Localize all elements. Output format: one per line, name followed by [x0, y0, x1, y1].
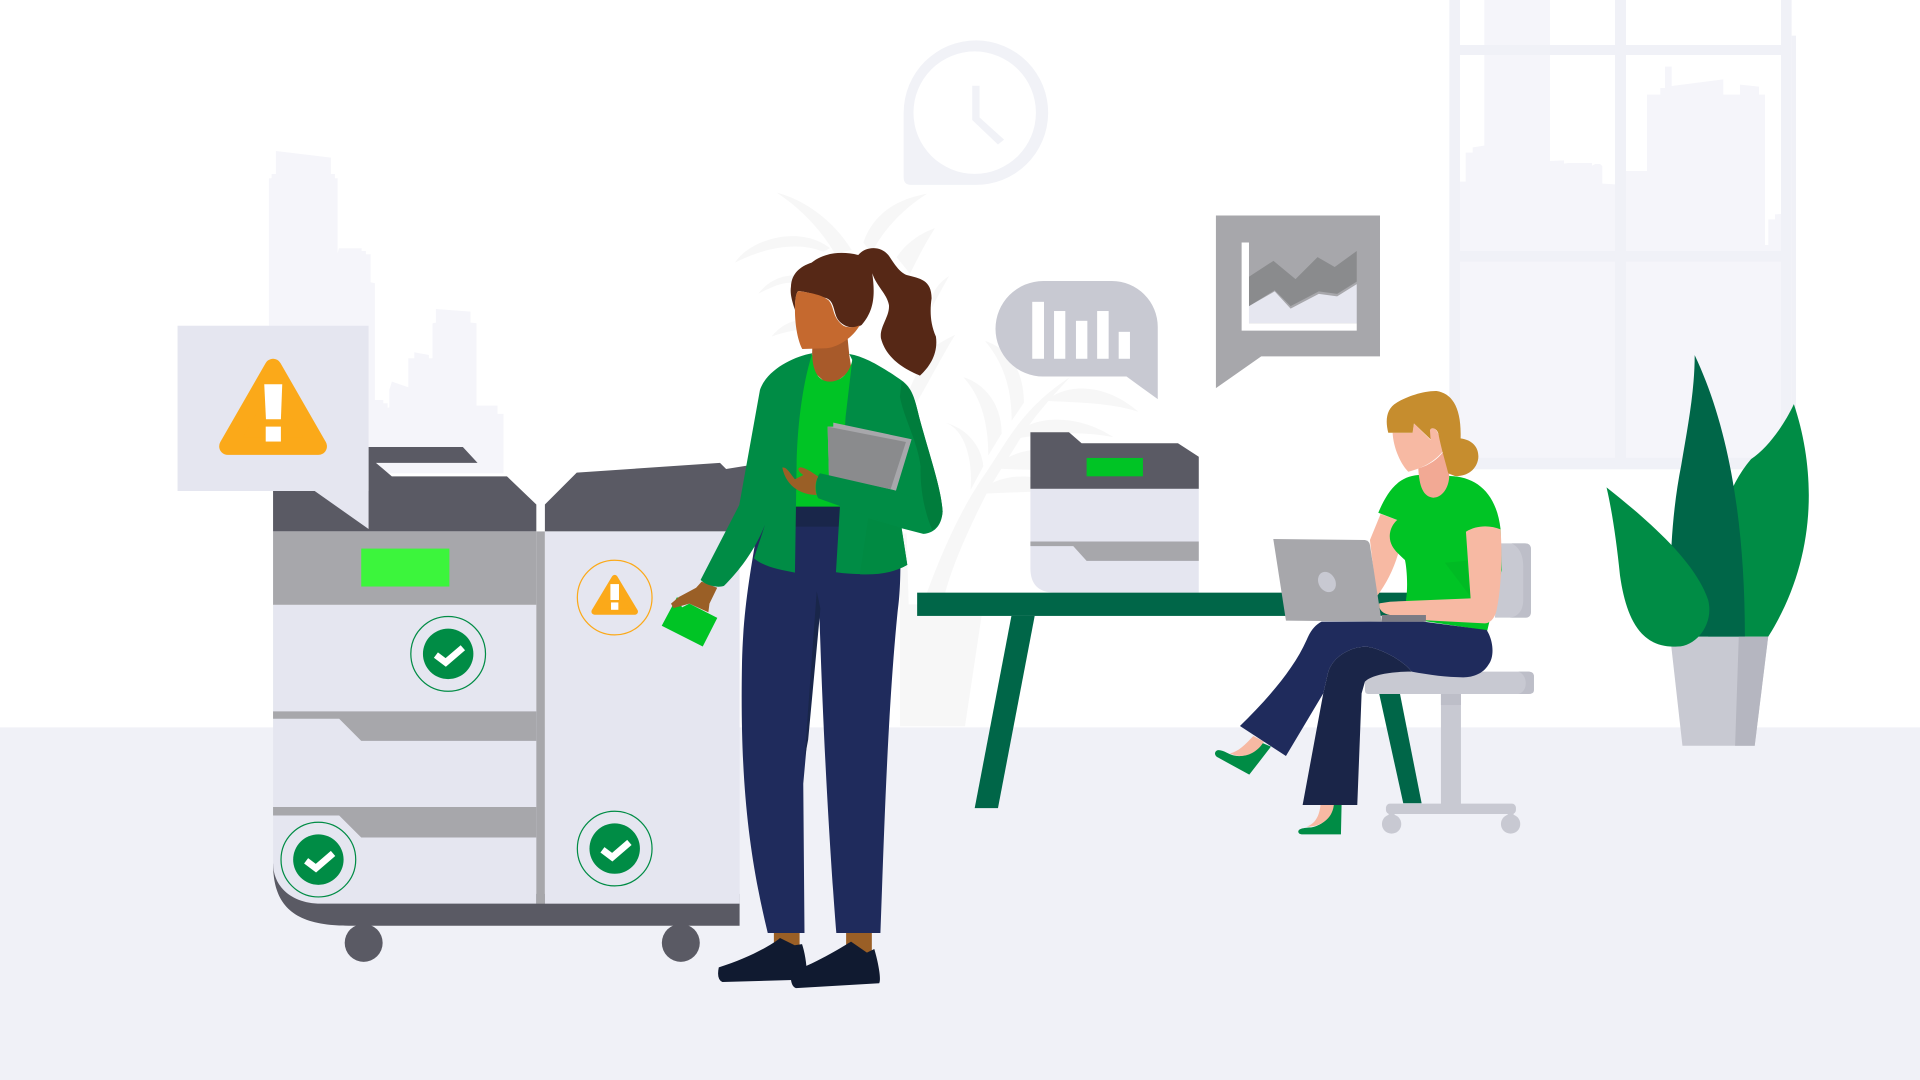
leaf: left [1607, 487, 1709, 647]
floor [0, 727, 1920, 1080]
status badge: check top [411, 617, 486, 691]
background plant: faded palm [735, 192, 1138, 726]
hair [1387, 391, 1478, 476]
chair back [1495, 543, 1531, 618]
standing woman: ankles [774, 931, 872, 955]
hair [791, 248, 936, 376]
leaf: right [1708, 404, 1809, 637]
standing woman: trousers [742, 520, 900, 933]
skyline: left buildings [269, 151, 504, 473]
far arm [1370, 514, 1398, 597]
back trouser leg [1303, 647, 1412, 805]
neck [1418, 452, 1449, 498]
status badge: check bottom right [577, 811, 652, 886]
base and rounded shadow [273, 863, 740, 926]
tablet [828, 423, 912, 491]
bars in bubble [1032, 302, 1130, 359]
status badge: warning [577, 560, 652, 635]
shirt fold [1445, 561, 1471, 597]
standing woman: shoes [718, 938, 880, 988]
display screen [361, 549, 449, 587]
leaf: tall dark [1670, 355, 1745, 637]
left body with paper trays [273, 605, 536, 904]
shirt [792, 355, 856, 507]
standing woman: upper body [701, 248, 943, 587]
window with skyline [1449, 0, 1796, 469]
paper in hand [662, 597, 717, 647]
near arm [1379, 526, 1501, 623]
shirt [1378, 475, 1502, 631]
near foot and shoe [1215, 736, 1271, 775]
belt band [795, 507, 842, 527]
far foot and shoe [1298, 803, 1342, 834]
jacket hem shade [860, 518, 907, 574]
right hand [782, 467, 818, 495]
icon: wall clock [904, 40, 1048, 185]
printer left top [273, 447, 536, 531]
plant pot [1670, 637, 1768, 746]
large floor printer [273, 447, 749, 962]
laptop [1273, 539, 1426, 622]
alert speech bubble [178, 326, 369, 529]
small desktop printer [1030, 432, 1199, 593]
jacket sleeve shade [900, 382, 943, 530]
potted plant [1607, 355, 1809, 746]
forearm [816, 473, 923, 528]
standing woman [662, 248, 943, 988]
seated woman on stool [1215, 391, 1534, 834]
standing woman: left hand [671, 582, 717, 612]
right body [545, 531, 740, 904]
face [795, 291, 860, 349]
front trouser leg [1240, 622, 1493, 756]
jacket left [701, 353, 812, 587]
neck [812, 338, 852, 387]
tray one handle [273, 711, 536, 741]
jacket right [836, 354, 943, 574]
image speech bubble: area chart [1216, 216, 1380, 388]
stool [1365, 672, 1534, 834]
tray two handle [273, 807, 536, 838]
chart speech bubble [996, 281, 1158, 399]
printer right top [545, 463, 749, 531]
status badge: check bottom left [281, 822, 356, 897]
background wall [0, 0, 1920, 727]
divider [536, 531, 545, 904]
wheels [345, 924, 700, 962]
desk [917, 593, 1422, 808]
trouser inner fold [804, 591, 820, 759]
control panel [273, 531, 536, 605]
face [1393, 423, 1444, 472]
